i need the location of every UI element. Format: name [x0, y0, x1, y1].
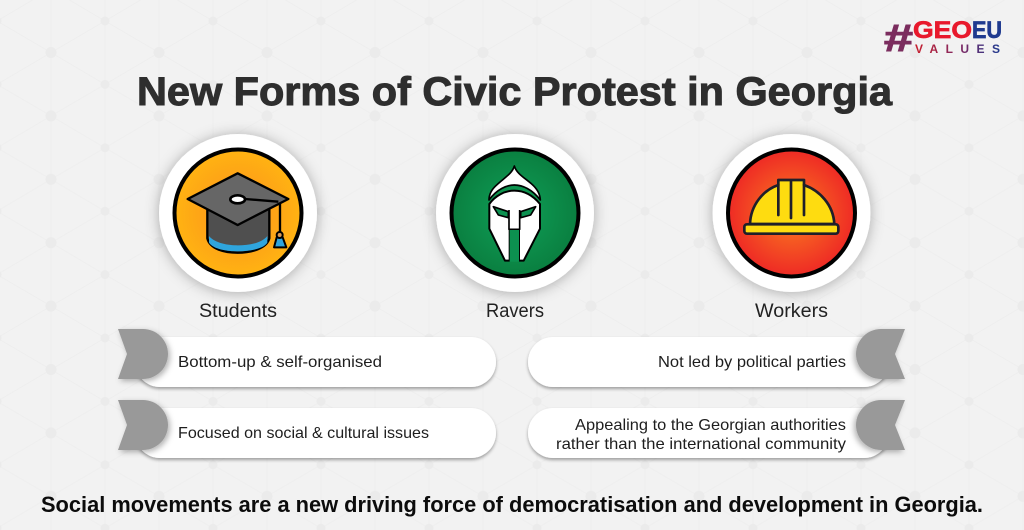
icon: hard hat [744, 180, 838, 234]
panel: ravers [436, 134, 594, 322]
logo: #GEOEU Values: EU [972, 17, 1002, 44]
white badge: workers [712, 134, 870, 292]
logo: #GEOEU Values [884, 17, 1002, 60]
text: georgian authorities: rather than the international community [556, 436, 846, 453]
icon: graduation cap [188, 173, 288, 253]
white badge: students [159, 134, 317, 292]
ribbon icon [856, 400, 905, 450]
green disc [452, 150, 578, 276]
icon: spartan helmet [489, 166, 540, 262]
red disc [728, 150, 855, 276]
text: social and cultural: Focused on social & cultural issues [178, 425, 429, 442]
logo: #GEOEU Values: VALUES [915, 42, 1000, 56]
logo: #GEOEU Values: # [884, 18, 913, 60]
callout: social and cultural [118, 400, 496, 458]
panel: workers [712, 134, 870, 322]
callout: georgian authorities [528, 400, 905, 458]
ribbon icon [118, 329, 168, 379]
callout: bottom-up [118, 329, 496, 387]
text: political parties: Not led by political parties [658, 354, 846, 371]
text: bottom-up: Bottom-up & self-organised [178, 354, 382, 371]
orange disc [174, 150, 302, 276]
title: New Forms of Civic Protest in Georgia [137, 70, 893, 114]
label: Workers: Workers [755, 301, 828, 322]
logo: #GEOEU Values: GEO [913, 17, 972, 44]
label: Ravers: Ravers [486, 301, 544, 322]
ribbon icon [118, 400, 168, 450]
text: georgian authorities [556, 417, 846, 453]
text: georgian authorities: Appealing to the Georgian authorities [575, 417, 846, 434]
ribbon icon [856, 329, 905, 379]
conclusion text: Social movements are a new driving force of democratisation and development in Georgia. [41, 492, 983, 517]
white badge: ravers [436, 134, 594, 292]
panel: students [159, 134, 317, 322]
callout: political parties [528, 329, 905, 387]
label: Students: Students [199, 301, 277, 322]
